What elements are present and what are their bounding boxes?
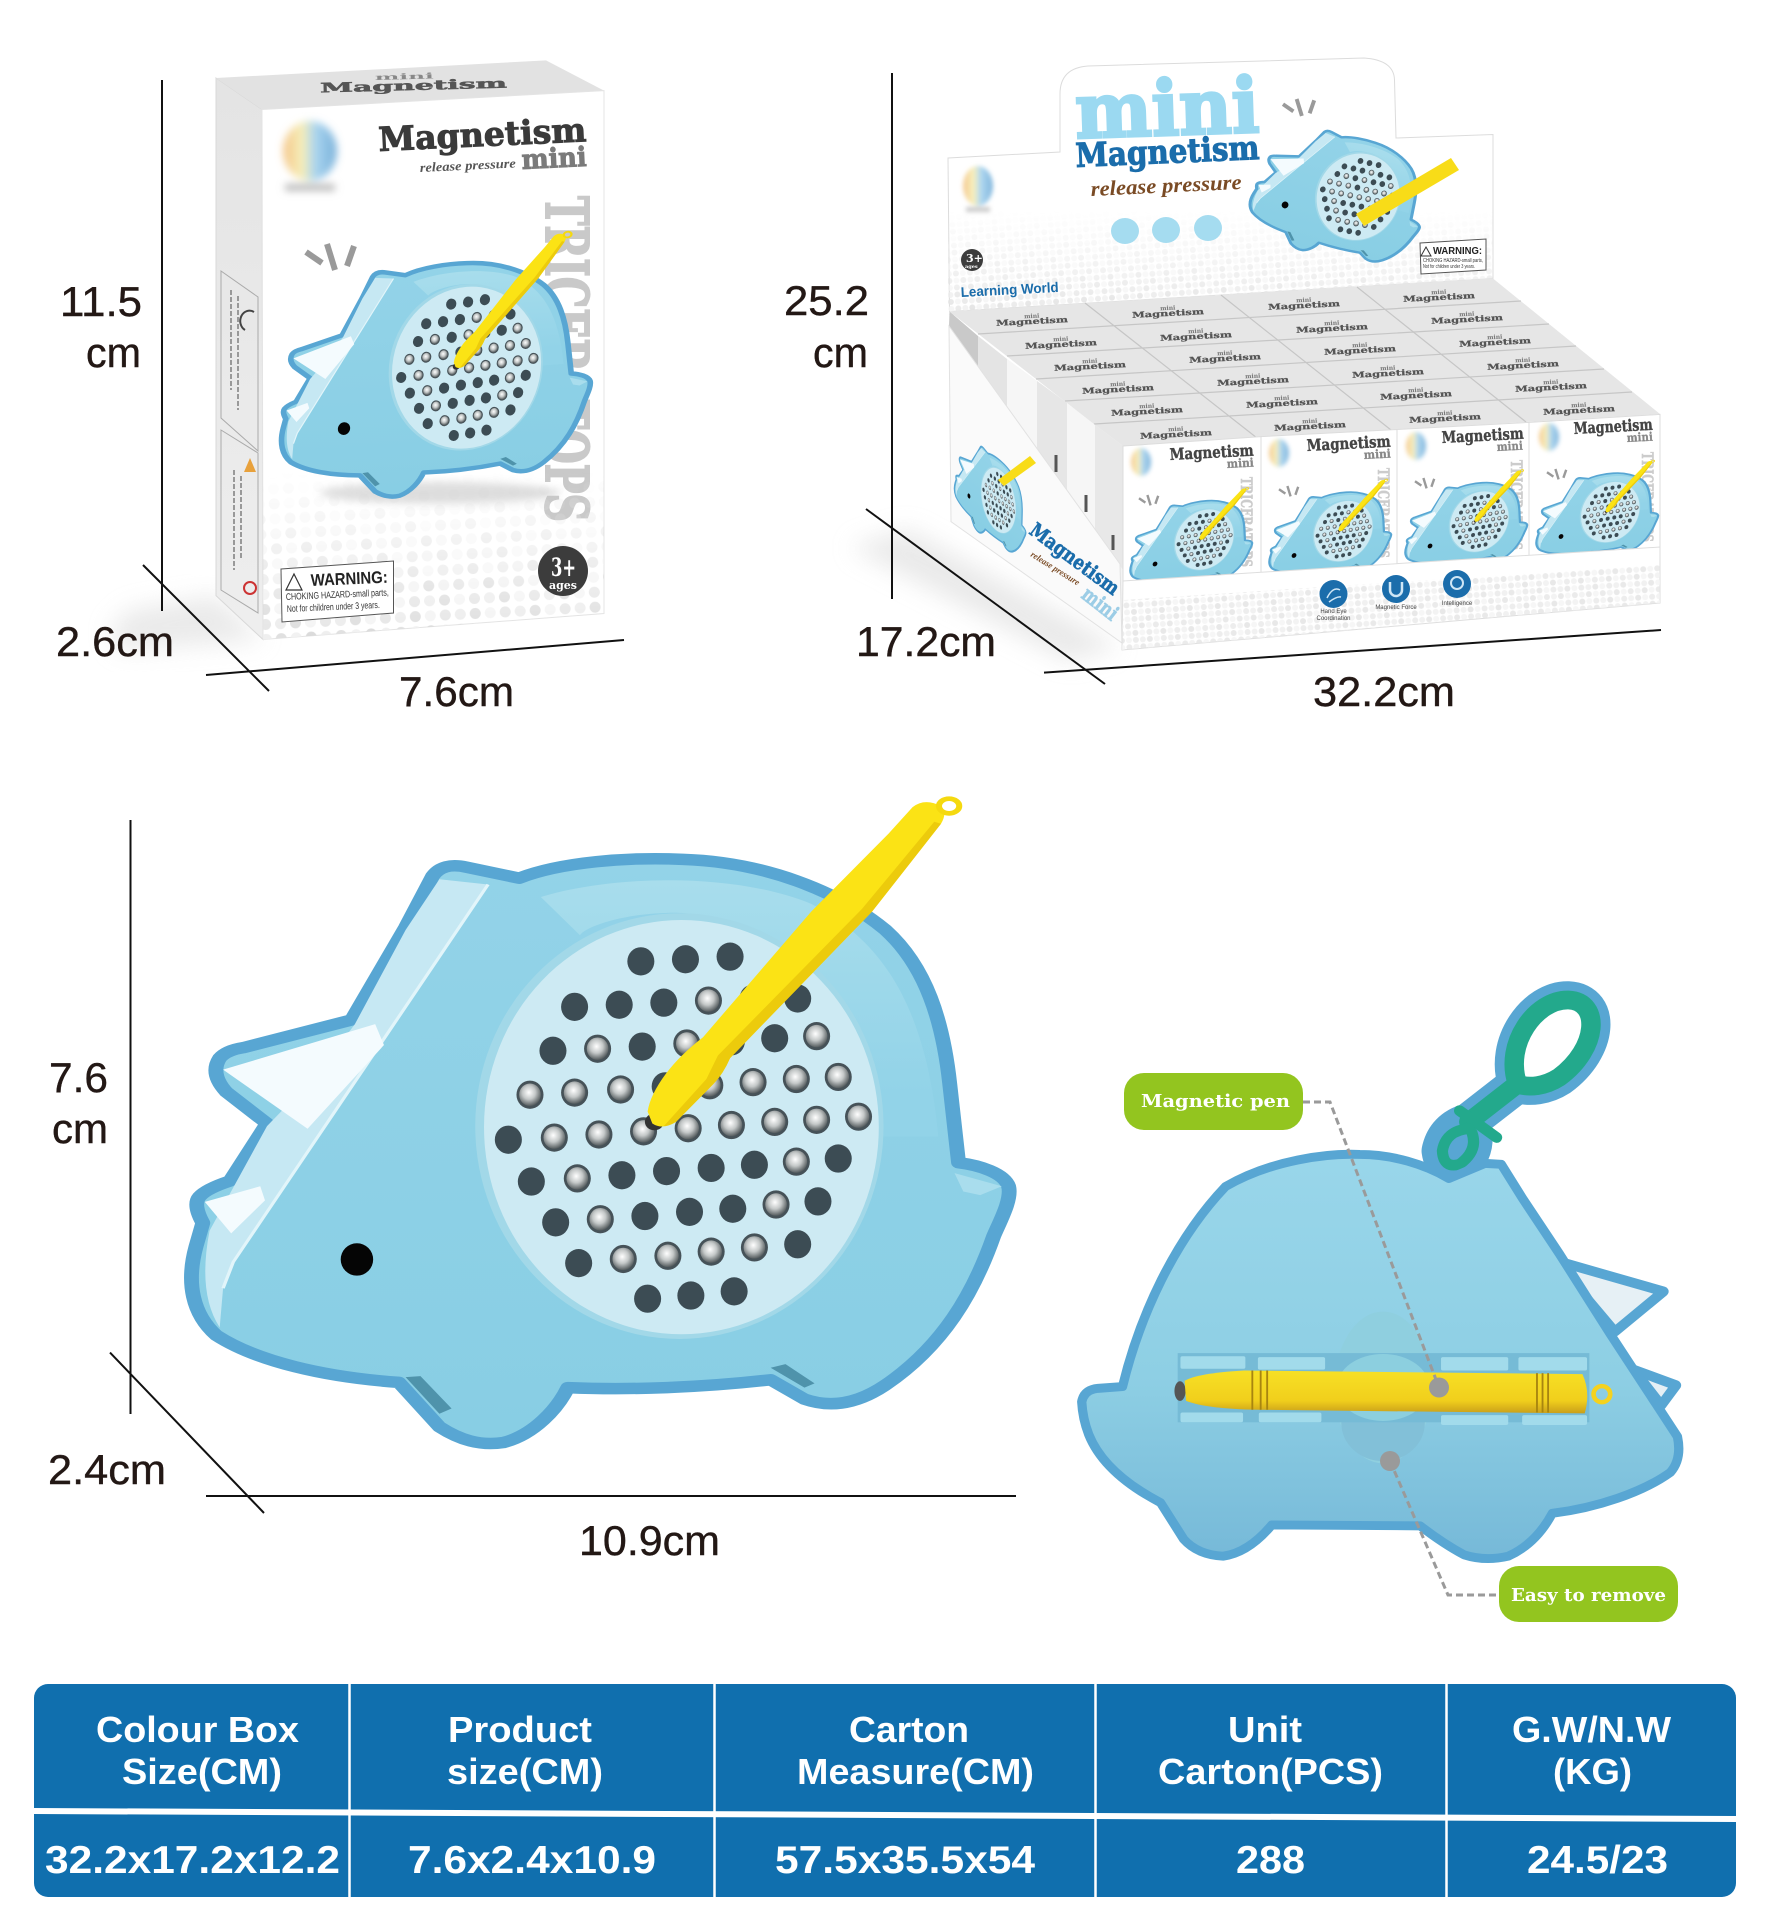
dimension: carton depth: 17.2cm	[856, 618, 996, 665]
side pen	[998, 456, 1036, 486]
column: product size	[408, 1709, 656, 1882]
icon: dinosaur on box	[282, 230, 590, 505]
Learning World: Learning World	[960, 279, 1059, 300]
age badge: 3+	[966, 252, 983, 265]
front box 2: mini	[1363, 447, 1392, 462]
dimension: carton width: 32.2cm	[1313, 668, 1455, 715]
column: product size: 7.6x2.4x10.9	[408, 1839, 656, 1882]
carton side triangle	[949, 326, 1122, 643]
column: product size: Product	[448, 1709, 592, 1750]
carton title mini: mini	[1074, 61, 1260, 156]
box top labels: mini	[1274, 395, 1290, 402]
column: colour box size	[45, 1709, 340, 1882]
box top labels: mini	[1543, 379, 1559, 386]
box top labels: mini	[1024, 313, 1040, 320]
column: colour box size: Colour Box	[96, 1709, 299, 1750]
tray icon: intelligence: Intelligence	[1442, 601, 1473, 607]
callout: Easy to remove	[1499, 1566, 1678, 1622]
column: gross and net weight: 24.5/23	[1527, 1839, 1668, 1882]
column: gross and net weight: (KG)	[1553, 1751, 1632, 1792]
box top labels: Magnetism	[1132, 306, 1205, 320]
box side face	[216, 78, 263, 640]
callout line: magnetic pen	[1303, 1102, 1449, 1398]
blurred logo	[963, 166, 993, 212]
warning label: WARNING:	[1433, 246, 1482, 257]
front box 3	[1397, 422, 1531, 575]
side tagline: release pressure	[1029, 549, 1082, 587]
box top labels: Magnetism	[1268, 298, 1341, 312]
box top face	[216, 60, 604, 110]
box top labels: Magnetism	[1403, 290, 1476, 304]
column: colour box size: 32.2x17.2x12.2	[45, 1839, 340, 1882]
age badge: 3+	[551, 553, 576, 582]
box top labels: mini	[1515, 357, 1531, 364]
shout marks	[306, 244, 354, 270]
side panel print	[221, 271, 258, 613]
tray icon: magnetic force: Magnetic Force	[1375, 605, 1417, 611]
dimension: box height: 11.5	[60, 278, 142, 325]
warning label	[281, 561, 394, 622]
magnetic pen back view	[1174, 1371, 1610, 1413]
dimension: carton height: 25.2	[784, 277, 869, 324]
finger recess	[1334, 1312, 1432, 1463]
box top labels: Magnetism	[1409, 411, 1482, 425]
box top labels: mini	[1352, 342, 1368, 349]
product back view	[1082, 1000, 1679, 1559]
column: colour box size: Size(CM)	[122, 1751, 282, 1792]
back panel dots	[948, 246, 1493, 312]
box top labels: Magnetism	[1296, 321, 1369, 335]
dimension: box height	[60, 278, 142, 376]
front box 3: Magnetism	[1441, 424, 1524, 447]
box tops grid	[950, 278, 1660, 446]
front box 2: Magnetism	[1306, 432, 1391, 455]
front box 3: mini	[1496, 439, 1523, 454]
box top labels: Magnetism	[1189, 351, 1262, 365]
age badge	[961, 249, 983, 271]
tray icon: hand eye coordination	[1316, 580, 1351, 622]
side title Magnetism: Magnetism	[1025, 518, 1125, 600]
box top labels: Magnetism	[1160, 329, 1233, 343]
box top labels: Magnetism	[996, 314, 1069, 328]
back body	[1082, 1154, 1679, 1559]
key clip	[1441, 1000, 1591, 1165]
feature icons	[1111, 215, 1222, 244]
box front face	[262, 91, 604, 640]
front box 1	[1123, 437, 1261, 593]
carton title Magnetism: Magnetism	[1075, 128, 1260, 175]
warning label: CHOKING HAZARD-small parts,	[1423, 258, 1483, 264]
carton tagline: release pressure	[1090, 170, 1242, 201]
box subtitle mini: mini	[521, 142, 587, 176]
box top labels: mini	[1168, 426, 1184, 433]
box top labels: Magnetism	[1274, 419, 1347, 433]
specification table	[34, 1684, 1736, 1897]
icon: dinosaur on carton	[1240, 115, 1440, 279]
box top labels: mini	[1053, 336, 1069, 343]
box top labels: mini	[1188, 328, 1204, 335]
box top labels: Magnetism	[1352, 366, 1425, 380]
box tagline: release pressure	[419, 155, 516, 175]
column: gross and net weight	[1512, 1709, 1671, 1882]
box top labels: Magnetism	[1025, 337, 1098, 351]
box top labels: mini	[1571, 402, 1587, 409]
dimension lines: colour box	[143, 80, 624, 691]
dino shadow	[320, 482, 560, 504]
box top labels: mini	[1459, 311, 1475, 318]
front box 4: TRICERATOPS	[1638, 452, 1657, 542]
dimension: product width: 10.9cm	[579, 1517, 720, 1564]
column: carton measure: 57.5x35.5x54	[775, 1839, 1035, 1882]
box top labels: Magnetism	[1082, 382, 1155, 396]
warning label: CHOKING HAZARD-small parts,	[286, 588, 389, 603]
carton left wall	[949, 312, 1123, 650]
dimension: product depth: 2.4cm	[48, 1446, 166, 1493]
warning label: Not for children under 3 years.	[287, 600, 380, 615]
box top labels: mini	[1082, 358, 1098, 365]
box top labels: Magnetism	[1459, 335, 1532, 349]
box top labels: Magnetism	[1487, 358, 1560, 372]
box top labels: mini	[1245, 373, 1261, 380]
box top labels: mini	[1380, 365, 1396, 372]
column: unit carton: 288	[1236, 1839, 1305, 1882]
box ground shadow	[110, 596, 263, 650]
front box 3: TRICERATOPS	[1507, 460, 1526, 550]
dimension lines: product	[110, 820, 1016, 1513]
carton ground shadow	[850, 529, 1120, 661]
dimension: box height: cm	[86, 329, 141, 376]
tray icon: hand eye coordination: Coordination	[1316, 616, 1351, 622]
box top labels: Magnetism	[1515, 380, 1588, 394]
box top labels: Magnetism	[1140, 427, 1213, 441]
vertical TRICERATOPS print: TRICERATOPS	[532, 196, 601, 522]
callout: Magnetic pen: Magnetic pen	[1141, 1091, 1290, 1112]
box top labels: mini	[1431, 289, 1447, 296]
box top labels: Magnetism	[1380, 388, 1453, 402]
box top labels: Magnetism	[1111, 404, 1184, 418]
dot pattern	[263, 514, 604, 640]
back spikes	[1555, 1260, 1676, 1405]
dimension lines: carton	[866, 73, 1661, 684]
tray icon: hand eye coordination: Hand Eye	[1320, 609, 1347, 615]
box top labels: mini	[1160, 305, 1176, 312]
column: carton measure: Measure(CM)	[797, 1751, 1034, 1792]
column: gross and net weight: G.W/N.W	[1512, 1709, 1671, 1750]
box top labels: mini	[1324, 320, 1340, 327]
tray icon: intelligence	[1442, 570, 1473, 607]
age badge: ages	[549, 579, 577, 592]
front box 1: TRICERATOPS	[1237, 477, 1256, 567]
dimension: product height: cm	[52, 1105, 108, 1152]
front box 2	[1261, 430, 1397, 585]
pen holder clips	[1178, 1353, 1589, 1425]
dimension: box width: 7.6cm	[399, 668, 514, 715]
box top labels: Magnetism	[1324, 343, 1397, 357]
side mini: mini	[1077, 581, 1124, 626]
dimension: carton height: cm	[813, 329, 868, 376]
warning label: WARNING:	[310, 568, 388, 590]
box top label: mini	[375, 70, 434, 82]
column: unit carton: Unit	[1228, 1709, 1302, 1750]
column: carton measure	[775, 1709, 1035, 1882]
front box 1: Magnetism	[1169, 441, 1254, 464]
carton pen	[1356, 158, 1459, 226]
icon: dinosaur on side	[952, 427, 1030, 569]
column: carton measure: Carton	[849, 1709, 969, 1750]
dimension: product height	[49, 1054, 108, 1152]
front box 4: mini	[1626, 430, 1653, 445]
column: product size: size(CM)	[447, 1751, 603, 1792]
box top labels: Magnetism	[1431, 312, 1504, 326]
box top labels: mini	[1437, 410, 1453, 417]
front box 4	[1529, 414, 1662, 566]
callout: Magnetic pen	[1124, 1073, 1303, 1130]
front box 1: mini	[1226, 456, 1255, 471]
box top labels: mini	[1110, 381, 1126, 388]
shout marks	[1283, 99, 1314, 116]
product front view: dinosaur with pen	[191, 799, 1009, 1444]
box title Magnetism: Magnetism	[378, 110, 587, 159]
age badge	[538, 546, 588, 596]
callout line: easy to remove	[1380, 1451, 1499, 1595]
column: unit carton: Carton(PCS)	[1158, 1751, 1383, 1792]
box top labels: Magnetism	[1054, 359, 1127, 373]
box top labels: mini	[1217, 350, 1233, 357]
box top label	[320, 69, 508, 96]
box top labels: Magnetism	[1217, 374, 1290, 388]
warning label: Not for children under 3 years.	[1423, 264, 1475, 270]
callout: Easy to remove: Easy to remove	[1511, 1585, 1666, 1606]
box top labels: mini	[1139, 403, 1155, 410]
front box 2: TRICERATOPS	[1374, 468, 1393, 558]
dimension: product height: 7.6	[49, 1054, 108, 1101]
box top labels: Magnetism	[1543, 403, 1616, 417]
warning label	[1420, 239, 1486, 274]
dimension: carton height	[784, 277, 869, 376]
box top labels	[996, 287, 1616, 441]
column: unit carton	[1158, 1709, 1383, 1882]
box top labels: mini	[1302, 418, 1318, 425]
box top labels: mini	[1296, 297, 1312, 304]
box top labels: mini	[1408, 387, 1424, 394]
front box 4: Magnetism	[1573, 415, 1653, 438]
front row boxes	[1123, 414, 1662, 593]
box top label: Magnetism	[320, 77, 508, 96]
carton front tray	[1122, 547, 1660, 650]
blurred logo	[283, 121, 337, 191]
box top labels: mini	[1487, 334, 1503, 341]
box top labels: Magnetism	[1246, 396, 1319, 410]
panel: single colour box	[110, 60, 605, 650]
panel: display carton	[850, 58, 1662, 661]
age badge: ages	[965, 264, 978, 270]
dimension: box depth: 2.6cm	[56, 618, 174, 665]
carton back panel	[948, 58, 1493, 312]
tray icon: magnetic force	[1375, 575, 1417, 611]
